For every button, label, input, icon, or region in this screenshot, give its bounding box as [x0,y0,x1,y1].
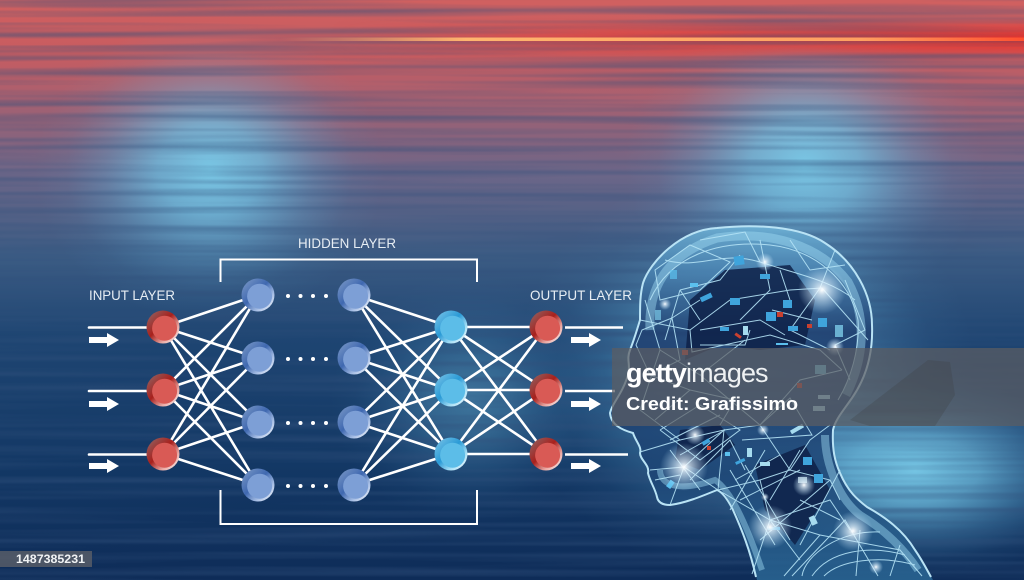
watermark band [612,348,1024,426]
head glass shell glow [650,236,918,570]
head dark circuit patches [675,265,830,545]
output lines and arrows [565,328,628,473]
network connections [89,295,546,485]
output layer nodes [530,310,562,470]
red laser streak [280,38,1024,41]
head circuit chips [655,255,843,530]
hidden layer nodes, first column [242,278,274,502]
watermark credit: Credit: Grafissimo [626,393,798,414]
hidden layer nodes, third column [434,310,468,470]
image id badge [0,551,92,567]
hidden layer nodes, second column [338,278,370,502]
head red accents [682,312,812,450]
heading: input layer: INPUT LAYER [89,287,175,303]
head light sparkles [659,253,883,574]
ellipsis dots between hidden columns [286,294,328,488]
icon: transparent digital human head [610,226,933,580]
heading: output layer: OUTPUT LAYER [530,287,632,303]
input layer nodes [146,310,180,470]
head wire mesh [636,232,922,576]
head outline [610,226,931,577]
image id badge: 1487385231 [16,554,86,566]
heading: hidden layer: HIDDEN LAYER [298,235,396,251]
watermark logo: gettyimages [626,358,768,388]
hidden layer bracket [220,260,477,524]
input arrows [89,333,119,473]
